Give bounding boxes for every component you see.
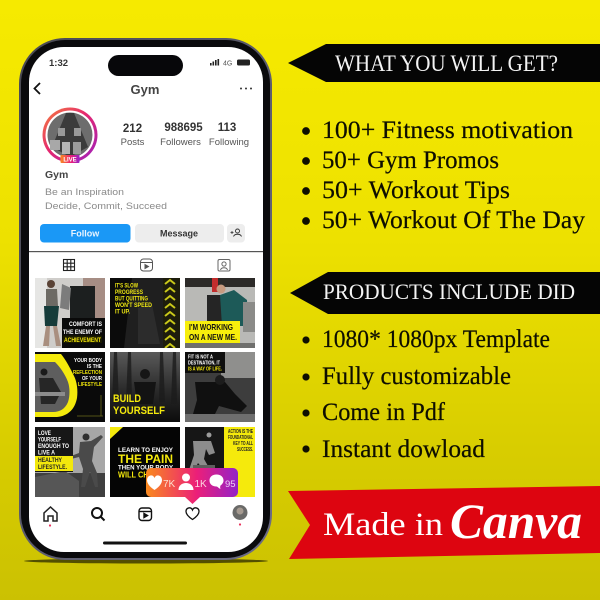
post tile: learn to enjoy the pain: WILL CHANGE	[118, 470, 171, 480]
phone mockup	[19, 38, 272, 560]
post tile: slow progress: PROGRESS	[115, 289, 144, 296]
list: what you get: 100+ Fitness motivation	[322, 117, 574, 144]
icon: home	[44, 507, 57, 521]
post tile: working on a new me: I'M WORKING	[189, 322, 233, 332]
icon: reels	[140, 259, 152, 271]
post tile: fit is not a destination	[185, 352, 255, 422]
banner: what you will get	[288, 44, 600, 82]
bottom navigation	[44, 505, 248, 527]
icon: heart	[147, 475, 162, 490]
post tile: build yourself: BUILD	[113, 393, 141, 405]
follow button	[40, 224, 130, 242]
list: product details	[302, 326, 550, 463]
status bar: 1:32	[49, 58, 68, 69]
profile stats: 113	[218, 122, 236, 134]
list: what you get: 50+ Gym Promos	[322, 147, 499, 174]
profile stats: 988695	[164, 122, 203, 134]
message button: Message	[160, 228, 198, 238]
bio: Be an Inspiration	[45, 187, 124, 198]
list: product details: Fully customizable	[322, 363, 511, 390]
profile stats: Following	[209, 137, 249, 148]
list: what you get	[302, 117, 586, 234]
post tile: love yourself: LIFESTYLE.	[38, 464, 67, 471]
icon: reels	[139, 508, 152, 520]
ribbon: made in canva: Made in	[323, 507, 443, 543]
post tile: build yourself	[110, 352, 180, 422]
post tile: love yourself: HEALTHY	[38, 457, 63, 464]
post tile: learn to enjoy the pain: THE PAIN	[118, 454, 173, 466]
phone screen	[29, 47, 263, 552]
post tile: fit is not a destination: DESTINATION, IT	[188, 360, 220, 366]
message button	[135, 224, 224, 242]
post tile: learn to enjoy the pain: LEARN TO ENJOY	[118, 447, 174, 454]
post tile: fit is not a destination: FIT IS NOT A	[188, 354, 213, 360]
post tile: slow progress	[110, 278, 180, 348]
post tile: slow progress: WON'T SPEED	[115, 302, 152, 309]
icon: heart	[186, 508, 199, 520]
post tile: love yourself	[35, 427, 105, 497]
post tile: working on a new me: ON A NEW ME.	[189, 332, 237, 342]
home indicator	[103, 542, 187, 544]
icon: grid	[64, 260, 74, 270]
profile stats: Followers	[160, 137, 201, 148]
live badge: LIVE	[63, 158, 77, 164]
notification popup: 95	[225, 479, 236, 490]
post tile: love yourself: LOVE	[38, 430, 51, 437]
post tile: love yourself: ENOUGH TO	[38, 443, 69, 450]
post tile: learn to enjoy the pain: THEN YOUR BODY	[118, 464, 174, 472]
list: product details: Instant dowload	[322, 436, 486, 463]
notification popup: 1K	[194, 479, 207, 490]
post tile: learn to enjoy the pain	[110, 427, 180, 497]
icon: person	[178, 474, 194, 490]
icon: comment	[210, 474, 224, 489]
profile header	[34, 82, 252, 97]
profile stats	[121, 122, 249, 148]
avatar with live ring	[42, 108, 98, 164]
profile tabs	[64, 259, 230, 271]
ribbon: made in canva	[288, 486, 600, 559]
post tile: slow progress: BUT QUITTING	[115, 296, 148, 302]
post tile: your body	[35, 352, 105, 422]
post tile: action is the foundation	[185, 427, 255, 497]
add friend button	[227, 224, 245, 242]
bio: Gym	[45, 169, 68, 181]
post tile: slow progress: IT UP.	[115, 308, 130, 316]
profile stats: 212	[123, 123, 142, 135]
post tile: working on a new me	[185, 278, 255, 348]
post tile: love yourself: YOURSELF	[38, 436, 61, 444]
banner: what you will get: WHAT YOU WILL GET?	[335, 51, 558, 76]
notification popup	[146, 468, 238, 504]
profile stats: Posts	[121, 137, 145, 148]
bio	[45, 169, 167, 212]
post tile: slow progress: IT'S SLOW	[115, 282, 139, 290]
bio: Decide, Commit, Succeed	[45, 201, 167, 212]
post tile: comfort	[35, 278, 105, 348]
phone shadow	[24, 558, 268, 564]
icon: profile avatar	[232, 505, 248, 520]
list: what you get: 50+ Workout Tips	[322, 177, 510, 204]
list: product details: Come in Pdf	[322, 399, 446, 426]
follow button: Follow	[71, 228, 100, 238]
post tile: fit is not a destination: IS A WAY OF LIFE.	[188, 366, 222, 372]
dynamic island	[108, 55, 183, 76]
banner: products include: PRODUCTS INCLUDE DID	[323, 279, 575, 304]
post tile: love yourself: LIVE A	[38, 450, 55, 456]
icon: search	[92, 508, 104, 520]
list: what you get: 50+ Workout Of The Day	[322, 207, 586, 234]
list: product details: 1080* 1080px Template	[322, 326, 550, 353]
profile header: Gym	[131, 82, 159, 97]
icon: tagged	[218, 260, 230, 271]
ribbon: made in canva: Canva	[450, 493, 582, 549]
post tile: build yourself: YOURSELF	[113, 405, 165, 417]
post tile: your body: IS THE	[87, 364, 102, 370]
banner: products include	[290, 272, 600, 314]
notification popup: 7K	[163, 479, 176, 490]
status bar	[49, 58, 250, 69]
status bar: 4G	[223, 60, 232, 68]
